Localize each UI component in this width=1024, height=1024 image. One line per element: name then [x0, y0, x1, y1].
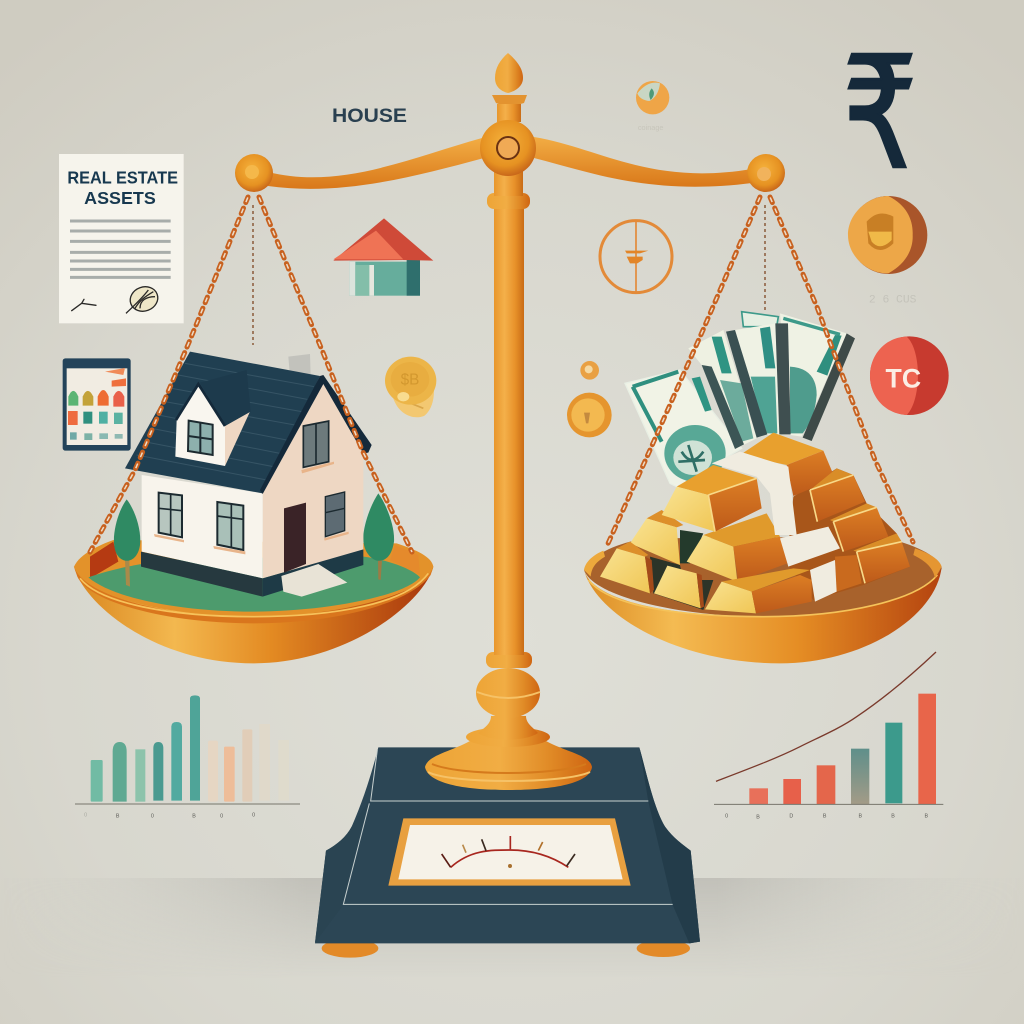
front window left: [154, 493, 184, 542]
document subtitle: ASSETS: [84, 188, 156, 208]
lower bars: [600, 542, 704, 608]
left pan chains: [90, 197, 412, 552]
icon: gold coin left: $B: [401, 372, 419, 389]
document title: REAL ESTATE: [67, 167, 178, 187]
central pivot: [480, 120, 536, 176]
trend line: [716, 652, 936, 781]
left chart axis ticks: B: [116, 813, 120, 819]
upper side window: [301, 421, 334, 473]
left pan: [74, 352, 433, 663]
lawn: [88, 557, 420, 612]
left chart axis ticks: 0: [84, 813, 87, 819]
left pan inner: [74, 540, 433, 617]
document signatures: [72, 283, 161, 315]
right chart axis ticks: B: [823, 814, 827, 820]
left pan bowl: [74, 567, 433, 663]
right pan: [584, 312, 942, 663]
chart: left bars: [75, 695, 300, 819]
middle bar left: [630, 510, 683, 565]
back bars: [787, 468, 910, 600]
right chart axis ticks: D: [789, 814, 793, 820]
icon: red coin: TC: [886, 363, 921, 393]
dormer window: [188, 421, 213, 455]
right chart axis ticks: B: [756, 814, 760, 820]
top back bar: [740, 433, 835, 496]
scale stand column: [425, 53, 592, 790]
icon: large gold coin: [848, 196, 927, 306]
right pan chains: [606, 197, 913, 548]
gold bars: [600, 433, 910, 613]
front wall: [142, 475, 263, 578]
left chart axis ticks: [84, 813, 255, 819]
icon: small coins: [567, 361, 612, 437]
roof: [125, 352, 372, 494]
icon: tablet with chart: [63, 358, 131, 451]
icon: red coin: [870, 336, 949, 415]
stand post: [494, 205, 524, 655]
icon: rupee symbol: ₹: [843, 24, 917, 204]
centre bar: [687, 513, 787, 582]
white straps: [712, 452, 840, 602]
foundation: [141, 549, 363, 597]
right stack: [810, 468, 910, 592]
gauge plate: [388, 818, 631, 886]
left chart axis ticks: 0: [252, 813, 255, 819]
panel: real estate assets document: [59, 154, 184, 323]
right pan inner: [584, 537, 942, 617]
lower front bar: [705, 568, 812, 613]
stand foot: [425, 652, 592, 790]
icon: small red roof house: [333, 218, 433, 296]
chimney: [288, 354, 311, 377]
left chart axis ticks: 0: [220, 813, 223, 819]
right chart axis ticks: B: [859, 814, 863, 820]
icon: gold coin left: [385, 357, 436, 417]
house: [125, 352, 372, 597]
faint caption: 2 6 CUS: [869, 294, 917, 306]
tree right: [363, 493, 394, 580]
right wall: [263, 383, 363, 578]
left chart axis ticks: 0: [151, 813, 154, 819]
icon: small coin top: [636, 81, 669, 132]
side window: [324, 492, 349, 541]
dormer: [175, 370, 251, 466]
icon: rupee ring: [600, 221, 672, 293]
plinth base: [315, 747, 700, 958]
left chart axis ticks: B: [192, 813, 196, 819]
front window right: [213, 502, 245, 554]
document text lines: [70, 221, 171, 277]
door: [284, 503, 306, 573]
banknotes: [625, 312, 855, 487]
faint caption: coinage: [638, 123, 664, 132]
tree left: [114, 499, 140, 587]
left beam knob: [235, 154, 273, 192]
right beam knob: [747, 154, 785, 192]
gauge dial: [442, 836, 575, 868]
heading: house label: HOUSE: [332, 106, 407, 127]
right chart axis ticks: B: [891, 814, 895, 820]
chart: right bars and trend line: [714, 652, 943, 820]
top front bar: [662, 465, 762, 532]
top finial: [492, 53, 527, 122]
right chart axis ticks: [725, 814, 929, 820]
right pan bowl: [584, 567, 942, 663]
right chart axis ticks: B: [925, 814, 929, 820]
right chart axis ticks: 0: [725, 814, 728, 820]
front steps: [281, 564, 347, 597]
balance beam: [235, 120, 785, 192]
